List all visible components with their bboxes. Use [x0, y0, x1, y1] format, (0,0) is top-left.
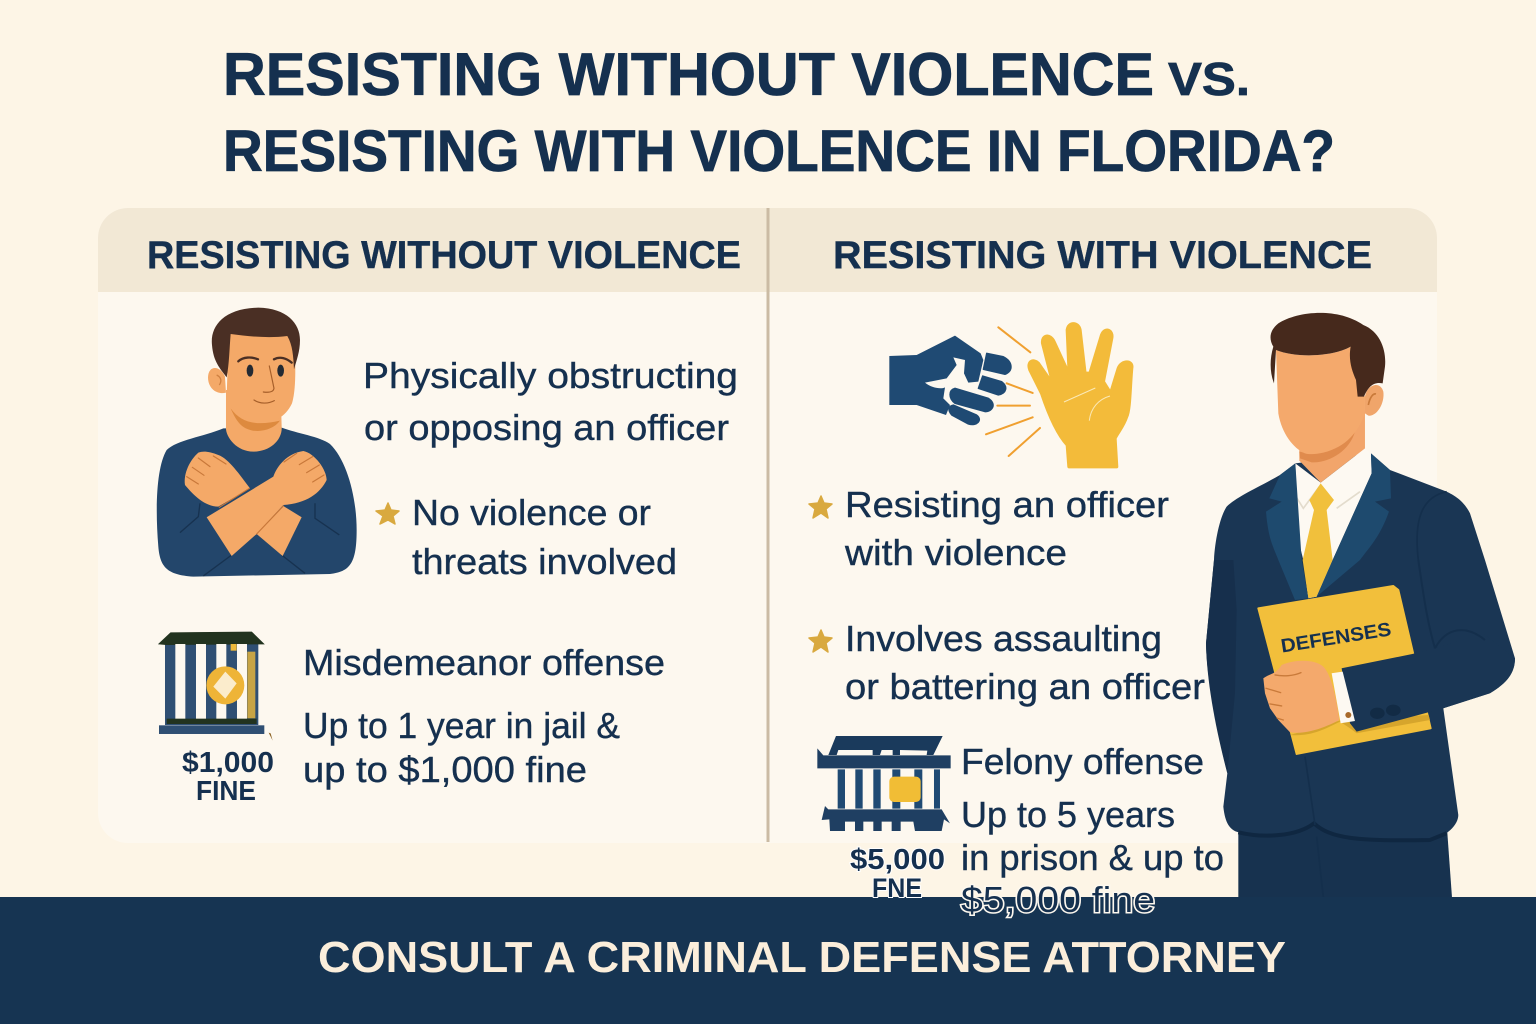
- bullet: no violence or threats: threats involved: [412, 541, 677, 582]
- icon: prison building with gold block: [817, 736, 951, 831]
- label: $1,000 fine: $1,000: [182, 747, 274, 779]
- panel: comparison card: [98, 208, 1437, 843]
- folder label: DEFENSES: [1279, 619, 1393, 658]
- hair: [1271, 313, 1385, 397]
- lapels: [1266, 453, 1391, 600]
- hand shadow: [1290, 715, 1430, 735]
- label: $1,000 fine: FINE: [196, 775, 256, 806]
- heading: resisting without violence: RESISTING WITHOUT VIOLENCE: [147, 234, 741, 277]
- text: felony penalties: [961, 741, 1224, 920]
- bullet: assaulting or battering: or battering an officer: [845, 666, 1205, 707]
- hand: [1263, 661, 1339, 733]
- text: misdemeanor penalties: Misdemeanor offense: [303, 642, 665, 683]
- bullet: no violence or threats: [376, 492, 677, 582]
- bullet: resisting with violence: Resisting an officer: [845, 484, 1169, 525]
- bullet: resisting with violence: [809, 484, 1169, 573]
- text: misdemeanor penalties: up to $1,000 fine: [303, 749, 587, 790]
- cuff: [1332, 672, 1355, 723]
- lawyer holding defenses folder: [1206, 313, 1515, 897]
- bullet: no violence or threats: No violence or: [412, 492, 651, 533]
- jacket shading: [1206, 560, 1237, 773]
- shirt: [1295, 448, 1372, 598]
- sleeve: [1342, 633, 1515, 732]
- icon: fist striking open hand: [889, 324, 1132, 467]
- bullet: resisting with violence: with violence: [844, 532, 1067, 573]
- footer banner: [0, 897, 1536, 1024]
- title: RESISTING WITHOUT VIOLENCE: [223, 41, 1154, 108]
- icon: man with crossed arms: [157, 308, 357, 577]
- face: [1276, 347, 1365, 454]
- jacket: [1206, 453, 1515, 840]
- label: $5,000 fine: [850, 844, 945, 903]
- text: felony penalties: Up to 5 years: [961, 794, 1175, 835]
- heading: resisting with violence: RESISTING WITH VIOLENCE: [833, 234, 1372, 277]
- text: felony penalties: in prison & up to: [961, 837, 1224, 878]
- text: physically obstructing: Physically obstructing: [363, 355, 738, 396]
- tie: [1303, 483, 1334, 598]
- trousers: [1238, 823, 1452, 897]
- text: misdemeanor penalties: Up to 1 year in jail &: [303, 705, 620, 746]
- neck: [1299, 410, 1365, 483]
- icon: jail cell with coin: [159, 632, 273, 741]
- bullet: assaulting or battering: Involves assaulting: [845, 618, 1162, 659]
- label: $5,000 fine: $5,000: [850, 844, 945, 876]
- title: RESISTING WITH VIOLENCE IN FLORIDA?: [223, 119, 1335, 184]
- footer banner: CONSULT A CRIMINAL DEFENSE ATTORNEY: [318, 933, 1286, 982]
- title: [223, 41, 1335, 184]
- text: felony penalties: $5,000 fine: [961, 879, 1155, 920]
- text: physically obstructing: [363, 355, 738, 448]
- label: $1,000 fine: [182, 747, 274, 806]
- bullet: assaulting or battering: [809, 618, 1205, 707]
- title: VS.: [1168, 53, 1250, 105]
- label: $5,000 fine: FNE: [872, 873, 922, 903]
- text: physically obstructing: or opposing an officer: [364, 407, 729, 448]
- ear: [1365, 385, 1384, 416]
- text: felony penalties: Felony offense: [961, 741, 1204, 782]
- folder: [1258, 586, 1431, 754]
- text: misdemeanor penalties: [303, 642, 665, 790]
